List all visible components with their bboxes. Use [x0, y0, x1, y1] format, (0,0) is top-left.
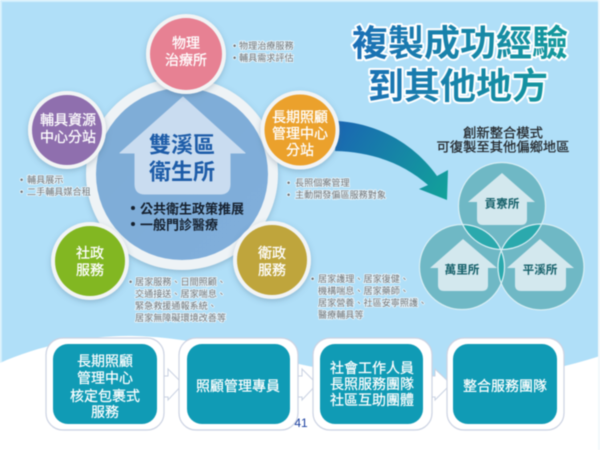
- subtitle: [437, 126, 569, 154]
- text: central services: [131, 202, 244, 232]
- text: assistive device notes: 二手輔具媒合租: [27, 186, 91, 197]
- box: care management center: [46, 338, 164, 430]
- arrow: curved to rural stations: [335, 121, 448, 200]
- box: service teams: 社會工作人員: [330, 360, 414, 376]
- text: assistive device notes: 輔具展示: [27, 174, 63, 185]
- circle: health administration: [233, 221, 311, 299]
- title: [352, 22, 568, 106]
- box: care management center: 管理中心: [77, 370, 133, 386]
- text: health administration notes: 居家護理、居家復健、: [318, 273, 409, 284]
- icon: central house: [120, 97, 245, 194]
- circle: long-term care: 管理中心: [272, 126, 328, 142]
- page number: 41: [294, 416, 308, 430]
- heading: central station name: 雙溪區: [149, 132, 215, 158]
- title: 到其他地方: [368, 66, 548, 106]
- box: integrated service team: 整合服務團隊: [463, 378, 547, 394]
- arrow: step 3 to 4: [428, 369, 451, 400]
- circle: health administration: 服務: [258, 262, 286, 278]
- text: assistive device notes: [20, 174, 91, 197]
- box: integrated service team: [447, 338, 564, 430]
- text: social service notes: 交通接送、居家喘息、: [135, 288, 226, 299]
- box: care management center: 長期照顧: [77, 353, 133, 369]
- text: health administration notes: 居家營養、社區安寧照護、: [318, 297, 427, 308]
- circle: assistive devices: 中心分站: [40, 129, 96, 145]
- text: long-term care notes: •: [287, 178, 290, 188]
- text: health administration notes: [311, 273, 427, 320]
- circle: health administration: 衛政: [258, 245, 286, 261]
- circle: social services: [51, 222, 129, 300]
- box: service teams: [313, 338, 432, 430]
- venn diagram: replicated stations: [420, 162, 584, 310]
- circle: assistive devices: [28, 91, 106, 169]
- circle: physical therapy: 治療所: [165, 52, 207, 68]
- circle: social services: 服務: [76, 262, 104, 278]
- subtitle: 可復製至其他偏鄉地區: [437, 138, 569, 154]
- text: central services: 一般門診醫療: [140, 218, 218, 232]
- icon: Pingxi house: [507, 239, 574, 291]
- circle: long-term care: 長期照顧: [272, 109, 328, 125]
- icon: Gongliao house: [468, 173, 535, 225]
- text: assistive device notes: •: [20, 187, 23, 197]
- box: care manager: 照顧管理專員: [196, 378, 280, 394]
- text: social service notes: •: [129, 277, 132, 287]
- icon: Wanli house: [430, 239, 497, 291]
- circle: social services: 社政: [76, 245, 104, 261]
- text: physical therapy notes: [233, 40, 294, 63]
- icon: Gongliao house: 貢寮所: [485, 196, 520, 210]
- text: health administration notes: 醫療輔具等: [318, 309, 363, 320]
- icon: Pingxi house: 平溪所: [523, 262, 558, 276]
- heading: central station name: 衛生所: [149, 160, 215, 184]
- text: physical therapy notes: 物理治療服務: [239, 40, 294, 51]
- text: assistive device notes: •: [20, 175, 23, 185]
- text: physical therapy notes: •: [233, 41, 236, 51]
- text: health administration notes: 機構喘息、居家藥師、: [318, 285, 409, 296]
- text: physical therapy notes: •: [233, 53, 236, 63]
- circle: long-term care: 分站: [286, 142, 314, 158]
- circle: long-term care: [260, 90, 340, 170]
- circle: physical therapy: 物理: [172, 35, 200, 51]
- text: social service notes: 緊急救援通報系統、: [135, 300, 217, 311]
- text: social service notes: 居家服務、日間照顧、: [135, 276, 226, 287]
- box: care management center: 核定包裹式: [70, 388, 140, 404]
- text: long-term care notes: •: [287, 190, 290, 200]
- panel: central health station: [86, 78, 278, 270]
- text: social service notes: [129, 276, 226, 323]
- text: long-term care notes: 主動開發偏區服務對象: [295, 189, 386, 200]
- text: health administration notes: •: [311, 274, 314, 284]
- circle: physical therapy: [146, 14, 226, 94]
- text: physical therapy notes: 輔具需求評估: [239, 52, 294, 63]
- text: social service notes: 居家無障礙環境改善等: [135, 312, 226, 323]
- box: care manager: [179, 338, 298, 430]
- arrow: step 1 to 2: [160, 369, 183, 400]
- text: central services: 公共衛生政策推展: [140, 202, 244, 216]
- text: long-term care notes: 長照個案管理: [295, 177, 350, 188]
- heading: central station name: [149, 132, 215, 184]
- subtitle: 創新整合模式: [463, 126, 543, 140]
- title: 複製成功經驗: [352, 22, 568, 64]
- box: care management center: 服務: [91, 404, 119, 420]
- circle: assistive devices: 輔具資源: [40, 112, 96, 128]
- arrow: step 2 to 3: [294, 369, 317, 400]
- icon: Wanli house: 萬里所: [445, 264, 480, 276]
- text: long-term care notes: [287, 177, 386, 200]
- box: service teams: 社區互助團體: [330, 392, 414, 408]
- box: service teams: 長照服務團隊: [330, 376, 414, 392]
